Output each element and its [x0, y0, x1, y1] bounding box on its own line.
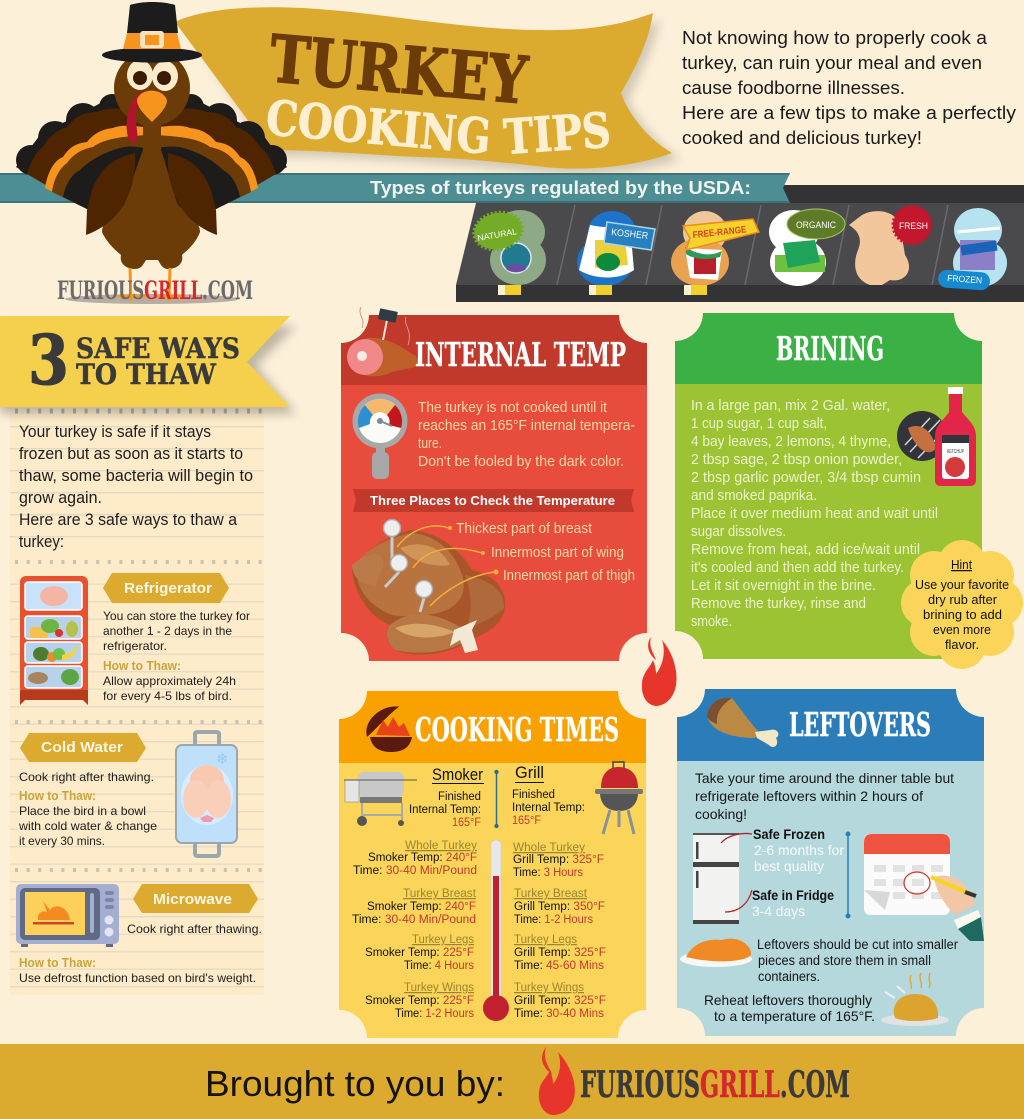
intro text [682, 27, 1017, 148]
brine recipe text: smoke. [691, 614, 732, 630]
smoker times: Time: 1-2 Hours [395, 1006, 474, 1020]
grill times: Time: 3 Hours [513, 865, 583, 879]
panel body [339, 691, 646, 1038]
head [114, 50, 190, 126]
icon: centre flame [642, 637, 677, 706]
cut and store text: Leftovers should be cut into smaller [757, 937, 958, 952]
temperature text: Don't be fooled by the dark color. [418, 454, 624, 470]
icon: gauge [352, 394, 408, 479]
cold water text: How to Thaw: [19, 789, 96, 803]
icon: bowl of cold water: ❄ [216, 751, 229, 768]
panel body [675, 313, 982, 659]
bag: natural: NATURAL [477, 226, 518, 243]
grill column heading: 165°F [512, 813, 541, 827]
column divider [494, 770, 499, 828]
brine recipe text: it's cooled and then add the turkey. [691, 560, 904, 576]
icon: ketchup bottle [935, 387, 976, 486]
label: cold water [20, 733, 146, 762]
thaw intro text: thaw, some bacteria will begin to [19, 467, 253, 485]
panel: internal temp [341, 307, 647, 661]
smoker column heading: Smoker [432, 765, 483, 784]
panel: brining [675, 313, 1023, 669]
intro text: Not knowing how to properly cook a [682, 27, 988, 48]
brine recipe text: sugar dissolves. [691, 524, 786, 540]
hint flower [901, 540, 1023, 669]
icon: smoker [344, 772, 417, 826]
thaw intro text: turkey: [19, 533, 64, 551]
icon: refrigerator [20, 576, 88, 705]
yellow ribbon: 3 [28, 321, 69, 401]
leftovers intro [695, 770, 954, 822]
microwave text [19, 922, 262, 985]
brine recipe text: 4 bay leaves, 2 lemons, 4 thyme, [691, 434, 891, 450]
hint flower: even more [933, 623, 991, 637]
brine recipe text: Let it sit overnight in the brine. [691, 578, 876, 594]
ribbon text: Types of turkeys regulated by the USDA: [370, 178, 751, 198]
probe labels: Thickest part of breast [456, 521, 592, 537]
smoker times: Time: 4 Hours [404, 958, 474, 972]
bag: fresh [849, 206, 931, 285]
panel body [341, 315, 647, 661]
bag: frozen [937, 208, 1007, 291]
tail fan [16, 94, 287, 209]
label: microwave: Microwave [153, 891, 232, 908]
smoker times: Smoker Temp: 225°F [365, 993, 474, 1007]
grill times [513, 840, 606, 1020]
smoker times: Smoker Temp: 240°F [367, 899, 476, 913]
grill column heading: Internal Temp: [512, 800, 585, 814]
reheat text: to a temperature of 165°F. [714, 1008, 875, 1024]
title: Tips: TIPS [502, 103, 613, 166]
leftovers intro: Take your time around the dinner table but [695, 770, 954, 786]
reheat text [704, 992, 875, 1024]
grill times: Grill Temp: 325°F [514, 993, 606, 1007]
icon: footer flame [539, 1047, 575, 1115]
panel: cooking times [339, 691, 646, 1038]
brine recipe text: Place it over medium heat and wait until [691, 506, 938, 522]
turkey mascot [16, 2, 287, 305]
intro text: cooked and delicious turkey! [682, 127, 922, 148]
panel: leftovers [677, 689, 984, 1036]
grill column heading: Finished [512, 787, 555, 801]
smoker times [352, 838, 478, 1020]
bag: free-range: FREE-RANGE [692, 224, 747, 241]
thermometer [483, 840, 509, 1021]
smoker column heading [409, 765, 484, 829]
thaw intro text: grow again. [19, 489, 102, 507]
refrigerator text: for every 4-5 lbs of bird. [103, 689, 232, 703]
refrigerator text: Allow approximately 24h [103, 674, 236, 688]
thaw intro text [19, 423, 253, 551]
heading: INTERNAL TEMP [415, 335, 626, 374]
bag: organic: ORGANIC [796, 220, 836, 230]
grill times: Time: 30-40 Mins [514, 1006, 604, 1020]
leftovers intro: cooking! [695, 806, 747, 822]
cold water text: Cook right after thawing. [19, 770, 154, 784]
grill times: Turkey Breast [514, 886, 588, 900]
smoker column heading: Finished [438, 789, 481, 803]
icon: roast with thermometer [347, 307, 420, 376]
intro text: Here are a few tips to make a perfectly [682, 102, 1017, 123]
price tags [498, 285, 707, 295]
logo: FURIOUSGRILL.COM [57, 276, 253, 305]
cold water text: Place the bird in a bowl [19, 804, 146, 818]
storage times: 2-6 months for [754, 842, 844, 858]
brine recipe text: 2 tbsp garlic powder, 3/4 tbsp cumin [691, 470, 921, 486]
hint flower: Hint [951, 558, 972, 572]
reheat text: Reheat leftovers thoroughly [704, 992, 872, 1008]
smoker times: Turkey Wings [404, 980, 474, 994]
icon: drumstick [707, 698, 778, 747]
smoker times: Time: 30-40 Min/Pound [353, 863, 477, 877]
icon: calendar and hand [864, 834, 984, 941]
bag: kosher [577, 211, 655, 286]
grill times: Grill Temp: 350°F [514, 899, 605, 913]
neck ruff marks [120, 147, 183, 154]
thaw intro text: Your turkey is safe if it stays [19, 423, 211, 441]
brine recipe text: Remove the turkey, rinse and [691, 596, 866, 612]
microwave text: Use defrost function based on bird's weight. [19, 971, 256, 985]
storage times [752, 827, 844, 919]
leftovers intro: refrigerate leftovers within 2 hours of [695, 788, 923, 804]
icon: ketchup bottle: KETCHUP [947, 449, 964, 455]
smoker times: Smoker Temp: 225°F [365, 945, 474, 959]
footer text: Brought to you by: [205, 1063, 505, 1104]
thaw intro text: frozen but as soon as it starts to [19, 445, 243, 463]
bag: free-range [671, 211, 759, 286]
sub-heading ribbon: Three Places to Check the Temperature [370, 493, 615, 508]
intro text: cause foodborne illnesses. [682, 77, 905, 98]
icon: kettle grill [595, 762, 643, 834]
fan left half [16, 94, 152, 209]
intro text: turkey, can ruin your meal and even [682, 52, 982, 73]
hint flower: brining to add [923, 608, 1002, 622]
icon: pot with flame [368, 708, 412, 752]
title: Turkey: TURKEY [267, 21, 531, 119]
bag: kosher: KOSHER [611, 227, 649, 242]
refrigerator text: refrigerator. [103, 639, 167, 653]
bag: natural [471, 208, 546, 285]
body [102, 120, 200, 269]
probe labels: Innermost part of wing [491, 545, 624, 561]
grill times: Turkey Legs [514, 932, 577, 946]
microwave text: Cook right after thawing. [127, 922, 262, 936]
hint flower: flavor. [945, 638, 979, 652]
smoker times: Turkey Legs [412, 932, 474, 946]
label: microwave [133, 884, 258, 913]
brine recipe text: Remove from heat, add ice/wait until [691, 542, 920, 558]
yellow ribbon: TO THAW [76, 358, 216, 391]
refrigerator text: You can store the turkey for [103, 609, 250, 623]
cut and store text: containers. [758, 969, 820, 984]
icon: bowl of cold water [176, 732, 237, 856]
icon: grill plate [897, 411, 947, 461]
roast turkey with probes [352, 520, 505, 655]
bag: frozen: FROZEN [947, 273, 982, 285]
yellow ribbon [0, 316, 296, 414]
grill column heading: Grill [515, 763, 544, 782]
shelf of turkey types [456, 185, 1024, 302]
title: Cooking: COOKING [264, 90, 493, 166]
storage times: Safe in Fridge [752, 888, 834, 903]
brine recipe text: 2 tbsp sage, 2 tbsp onion powder, [691, 452, 902, 468]
brine recipe text: and smoked paprika. [691, 488, 817, 504]
bag: fresh: FRESH [899, 221, 928, 231]
panel: 3 safe ways to thaw [0, 316, 296, 996]
label: refrigerator: Refrigerator [124, 580, 212, 597]
cold water text [18, 770, 157, 848]
heading: COOKING TIMES [415, 710, 619, 749]
cold water text: with cold water & change [18, 819, 157, 833]
icon: reheated turkey [881, 973, 949, 1026]
smoker column heading: 165°F [452, 815, 481, 829]
wings [86, 153, 217, 235]
refrigerator text: another 1 - 2 days in the [103, 624, 232, 638]
smoker times: Smoker Temp: 240°F [368, 850, 477, 864]
cold water text: it every 30 mins. [19, 834, 105, 848]
storage times: Safe Frozen [753, 827, 825, 842]
ground shadow [65, 294, 239, 304]
grill times: Whole Turkey [513, 840, 586, 854]
storage times: 3-4 days [752, 903, 805, 919]
grill times: Turkey Wings [514, 980, 584, 994]
sub-heading ribbon [353, 489, 634, 512]
grill times: Grill Temp: 325°F [513, 852, 604, 866]
brine recipe text: In a large pan, mix 2 Gal. water, [691, 398, 890, 414]
label: cold water: Cold Water [41, 739, 123, 756]
cut and store text: pieces and store them in small [758, 953, 931, 968]
legs [118, 268, 182, 301]
panel header [339, 691, 646, 763]
icon: fridge [693, 833, 752, 924]
leftovers divider [846, 832, 850, 918]
brine recipe text [691, 398, 938, 630]
brine recipe text: 1 cup sugar, 1 cup salt, [691, 416, 827, 432]
storage times: best quality [754, 858, 824, 874]
hint flower: Use your favorite [915, 578, 1009, 592]
panel body [677, 689, 984, 1036]
smoker times: Time: 30-40 Min/Pound [352, 912, 476, 926]
probe labels: Innermost part of thigh [503, 568, 635, 584]
grill times: Time: 45-60 Mins [514, 958, 604, 972]
icon: microwave [16, 884, 119, 947]
temperature text: reaches an 165°F internal tempera- [418, 418, 635, 434]
footer [0, 1044, 1024, 1119]
grill times: Grill Temp: 325°F [514, 945, 606, 959]
smoker column heading: Internal Temp: [409, 802, 481, 816]
teal ribbon [0, 173, 790, 203]
grill column heading [512, 763, 585, 827]
icon: plated leftovers [680, 939, 752, 967]
smoker times: Turkey Breast [403, 886, 477, 900]
beak [137, 91, 167, 122]
panel header [675, 313, 982, 384]
footer logo: FURIOUSGRILL.COM [580, 1064, 850, 1106]
bag: organic [769, 209, 845, 286]
temperature text: ture. [418, 436, 442, 452]
yellow ribbon: SAFE WAYS [76, 332, 240, 365]
panel header [341, 315, 647, 385]
cut and store text [757, 937, 958, 984]
grill times: Time: 1-2 Hours [514, 912, 593, 926]
label: refrigerator [103, 573, 229, 603]
notebook page [10, 408, 264, 996]
heading: BRINING [776, 329, 884, 368]
probe labels [456, 521, 635, 584]
smoker times: Whole Turkey [405, 838, 478, 852]
wattle [127, 93, 146, 143]
refrigerator text: How to Thaw: [103, 659, 181, 673]
pilgrim hat [102, 2, 202, 62]
title banner [175, 7, 680, 175]
thaw intro text: Here are 3 safe ways to thaw a [19, 511, 238, 529]
hint flower: dry rub after [928, 593, 997, 607]
heading: LEFTOVERS [789, 705, 931, 744]
temperature text: The turkey is not cooked until it [418, 400, 607, 416]
temperature text [418, 400, 635, 470]
refrigerator text [103, 609, 250, 703]
fan right half [151, 94, 287, 209]
panel header [677, 689, 984, 761]
eyes [127, 60, 178, 91]
microwave text: How to Thaw: [19, 956, 96, 970]
